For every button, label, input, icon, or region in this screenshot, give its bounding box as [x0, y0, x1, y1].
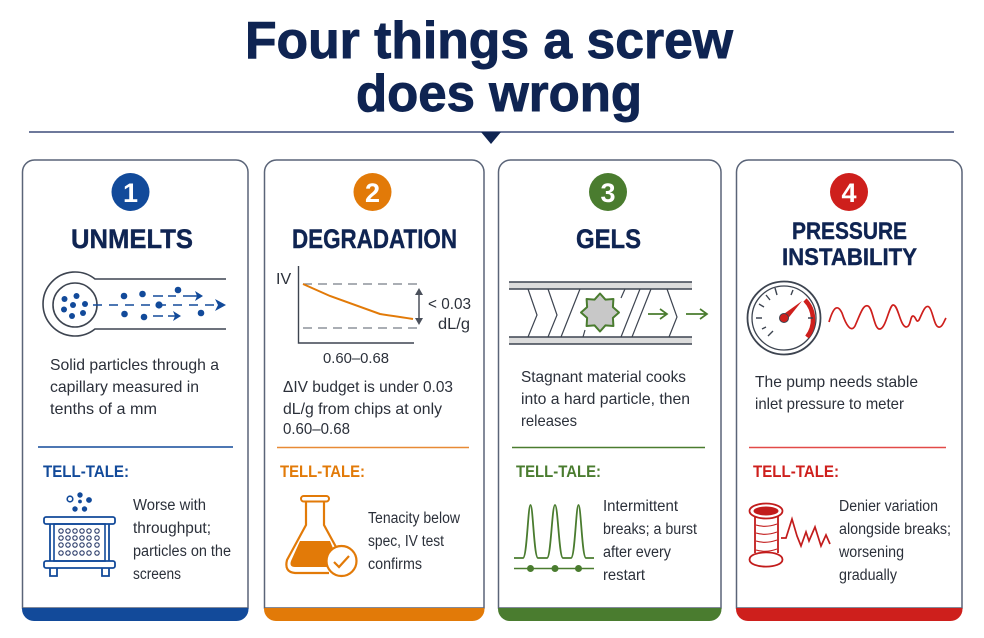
- title divider with pointer: [29, 132, 954, 144]
- tell-tale label: TELL-TALE:: [753, 462, 839, 481]
- panel: gels: [498, 160, 722, 621]
- body text: releases: [521, 413, 577, 430]
- body text: Solid particles through a: [50, 357, 219, 374]
- body text: 0.60–0.68: [283, 421, 350, 438]
- body text: dL/g from chips at only: [283, 401, 442, 418]
- heading: pressure instability: [782, 218, 917, 271]
- color band: orange: [264, 608, 484, 621]
- tell-tale label: TELL-TALE:: [280, 462, 365, 481]
- chart: IV decline: < 0.03: [428, 296, 471, 313]
- number badge 2: [354, 173, 392, 211]
- tell-tale text: Worse with: [133, 497, 206, 514]
- chart: IV decline: 0.60–0.68: [323, 351, 389, 367]
- tell-tale text: Intermittent: [603, 498, 679, 515]
- panel: pressure instability: [736, 160, 962, 621]
- tell-tale text: [838, 498, 951, 584]
- icon: pressure gauge: [748, 282, 820, 354]
- number badge 2: 2: [365, 178, 380, 208]
- tell-tale text: [368, 510, 461, 573]
- body text: [521, 369, 690, 430]
- tell-tale text: screens: [133, 566, 181, 583]
- title: Four things a screw: [245, 12, 734, 70]
- tell-tale text: restart: [603, 567, 646, 584]
- title: [245, 12, 734, 123]
- heading: gels: GELS: [576, 224, 641, 254]
- body text: [283, 379, 453, 438]
- tell-tale text: breaks; a burst: [603, 521, 698, 538]
- tell-tale text: alongside breaks;: [839, 521, 951, 538]
- heading: unmelts: UNMELTS: [71, 224, 193, 254]
- tell-tale label: TELL-TALE:: [43, 462, 129, 481]
- tell-tale text: Tenacity below: [368, 510, 461, 527]
- tell-tale text: [133, 497, 231, 583]
- tell-tale text: after every: [603, 544, 671, 561]
- color band: green: [498, 608, 722, 621]
- icon: yarn spool: [750, 504, 830, 567]
- tell-tale text: spec, IV test: [368, 533, 445, 550]
- number badge 1: [112, 173, 150, 211]
- chart: IV decline: IV: [276, 271, 291, 288]
- icon: flask with check: [286, 496, 356, 576]
- number badge 3: 3: [600, 178, 616, 208]
- body text: [50, 357, 219, 418]
- color band: blue: [22, 608, 248, 621]
- icon: screen filter: [44, 492, 115, 576]
- body text: The pump needs stable: [755, 374, 918, 391]
- tell-tale label: TELL-TALE:: [516, 462, 601, 481]
- body text: capillary measured in: [50, 379, 199, 396]
- body text: into a hard particle, then: [521, 391, 690, 408]
- chart: pressure wave: [829, 305, 946, 329]
- number badge 3: [589, 173, 627, 211]
- tell-tale text: worsening: [838, 544, 904, 561]
- icon: screw channel with gel: [509, 282, 707, 344]
- tell-tale text: Denier variation: [839, 498, 938, 515]
- heading: pressure instability: INSTABILITY: [782, 244, 917, 271]
- icon: capillary with particles: [43, 272, 226, 336]
- heading: pressure instability: PRESSURE: [792, 218, 907, 245]
- icon: burst peaks: [514, 505, 594, 572]
- tell-tale text: throughput;: [133, 520, 211, 537]
- tell-tale text: particles on the: [133, 543, 231, 560]
- body text: Stagnant material cooks: [521, 369, 686, 386]
- tell-tale text: [603, 498, 698, 584]
- body text: inlet pressure to meter: [755, 396, 905, 413]
- heading: degradation: DEGRADATION: [292, 224, 457, 254]
- panel: degradation: [264, 160, 484, 621]
- panel: unmelts: [22, 160, 248, 621]
- tell-tale text: confirms: [368, 556, 422, 573]
- number badge 4: [830, 173, 868, 211]
- color band: red: [736, 608, 962, 621]
- number badge 1: 1: [123, 178, 138, 208]
- chart: IV decline: dL/g: [438, 316, 470, 333]
- chart: IV decline: [276, 266, 471, 367]
- title: does wrong: [356, 65, 642, 123]
- tell-tale text: gradually: [839, 567, 897, 584]
- number badge 4: 4: [841, 178, 857, 208]
- body text: tenths of a mm: [50, 401, 157, 418]
- body text: [755, 374, 918, 413]
- body text: ΔIV budget is under 0.03: [283, 379, 453, 396]
